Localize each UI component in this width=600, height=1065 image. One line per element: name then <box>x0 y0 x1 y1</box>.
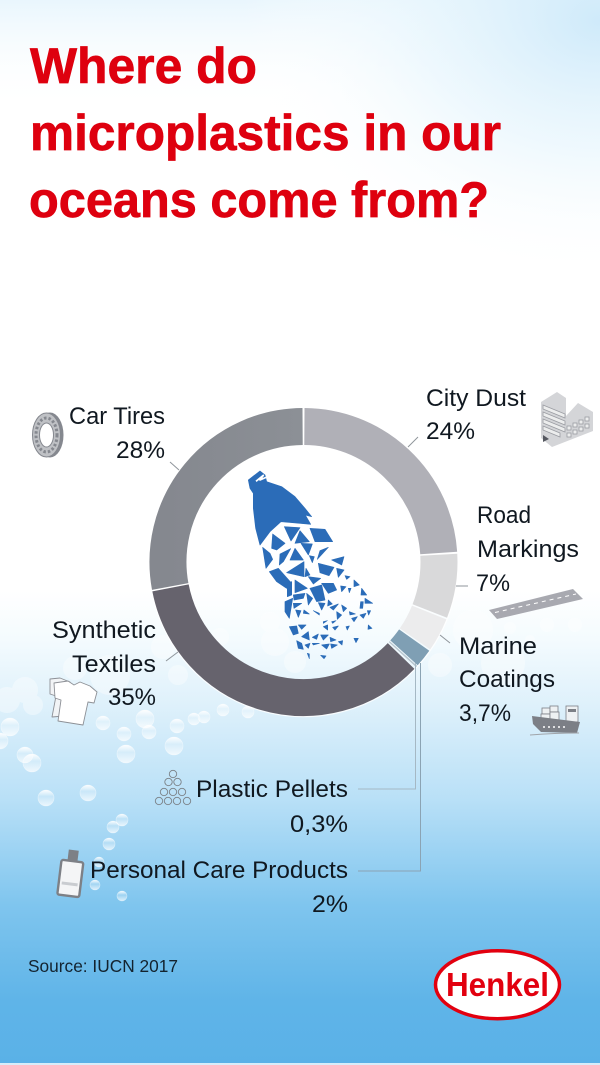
label: Synthetic Textiles 35%: Textiles <box>72 651 156 678</box>
icon: city buildings <box>541 392 593 447</box>
label: City Dust 24% <box>426 385 526 445</box>
label: Marine Coatings 3,7%: Marine <box>459 633 537 660</box>
label: Plastic Pellets 0,3% <box>196 776 348 838</box>
label: Personal Care Products 2% <box>90 857 348 918</box>
label: Car Tires 28%: Car Tires <box>69 403 165 430</box>
label: Road Markings 7%: Markings <box>477 536 579 563</box>
logo: Henkel <box>436 951 560 1019</box>
segment: Road Markings 7% <box>430 555 439 611</box>
segment: Marine Coatings 3,7% <box>415 612 429 639</box>
title: oceans come from? <box>29 172 489 228</box>
segment: Car Tires 28% <box>168 426 303 586</box>
label: Marine Coatings 3,7%: Coatings <box>459 666 555 693</box>
bubbles in the water <box>0 610 582 901</box>
leader lines <box>166 437 468 871</box>
title <box>29 38 501 228</box>
label: Plastic Pellets 0,3%: 0,3% <box>290 811 348 838</box>
segment: City Dust 24% <box>304 426 439 553</box>
icon: road <box>489 589 583 619</box>
icon: shattering plastic bottle <box>248 471 373 659</box>
donut chart <box>149 408 458 716</box>
segment: Personal Care Products 2% <box>404 640 414 653</box>
label: City Dust 24%: 24% <box>426 418 475 445</box>
label: Road Markings 7% <box>476 502 579 597</box>
label: Plastic Pellets 0,3%: Plastic Pellets <box>196 776 348 803</box>
label: Car Tires 28%: 28% <box>116 437 165 464</box>
label: Personal Care Products 2%: 2% <box>312 891 348 918</box>
label: Synthetic Textiles 35%: 35% <box>108 684 156 711</box>
logo: Henkel: Henkel <box>446 966 549 1003</box>
label: Marine Coatings 3,7% <box>459 633 555 727</box>
segment: Synthetic Textiles 35% <box>170 588 401 698</box>
label: Synthetic Textiles 35%: Synthetic <box>52 617 156 644</box>
icon: personal care bottle <box>57 849 85 897</box>
icon: cargo ship <box>530 706 580 735</box>
icon: t-shirts <box>50 678 97 725</box>
source note: Source: IUCN 2017 <box>28 956 178 976</box>
label: Synthetic Textiles 35% <box>52 617 156 711</box>
icon: car tire <box>32 412 64 458</box>
label: Car Tires 28% <box>69 403 165 464</box>
label: Road Markings 7%: 7% <box>476 570 510 597</box>
label: City Dust 24%: City Dust <box>426 385 526 412</box>
icon: plastic pellets <box>155 770 191 805</box>
title: microplastics in our <box>30 105 501 161</box>
label: Personal Care Products 2%: Personal Care Products <box>90 857 348 884</box>
label: Road Markings 7%: Road <box>477 502 531 529</box>
segment: Plastic Pellets 0,3% <box>402 654 403 655</box>
title: Where do <box>30 38 257 94</box>
label: Marine Coatings 3,7%: 3,7% <box>459 700 511 727</box>
